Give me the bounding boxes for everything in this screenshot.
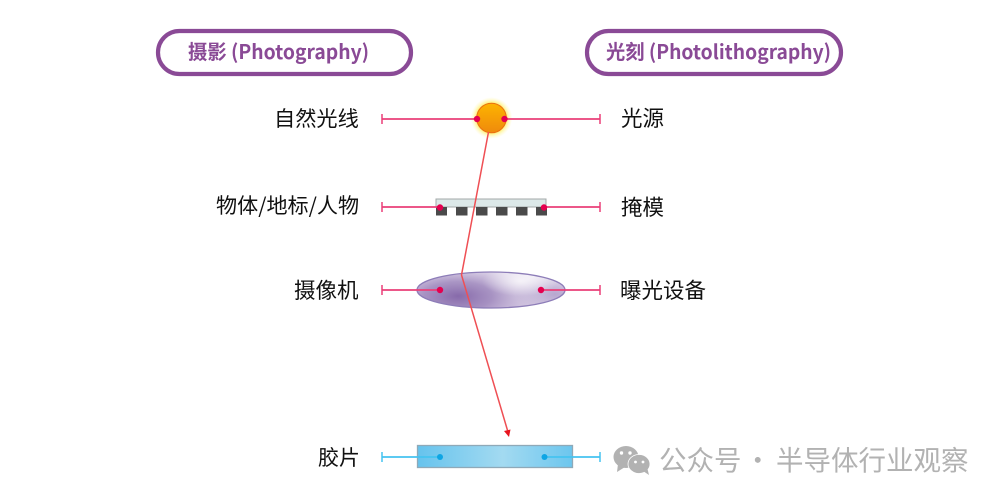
watermark text: ·	[744, 438, 772, 478]
heading: photolithography	[587, 31, 841, 74]
icon: sun light source	[471, 98, 512, 138]
watermark: WeChat account	[614, 438, 968, 478]
label: light source: 光源	[621, 102, 664, 133]
heading: photography: 摄影 (Photography)	[188, 36, 369, 65]
label: film: 胶片	[318, 442, 360, 472]
connector: mask row	[382, 202, 600, 212]
connector: lens row	[382, 285, 600, 295]
icon: WeChat logo	[614, 446, 650, 475]
label: natural light: 自然光线	[274, 102, 359, 133]
label: object / landmark / person: 物体/地标/人物	[216, 190, 359, 220]
connector: film row	[382, 452, 600, 462]
connector: light source row	[382, 114, 600, 124]
arrow: light ray	[462, 132, 510, 437]
heading: photolithography: 光刻 (Photolithography)	[606, 36, 831, 65]
icon: film plate	[418, 446, 572, 468]
icon: photomask	[436, 199, 547, 216]
watermark text: 公众号	[659, 438, 742, 478]
label: mask: 掩模	[621, 191, 664, 222]
heading: photography	[158, 31, 411, 74]
label: exposure equipment: 曝光设备	[620, 274, 706, 305]
watermark text: 半导体行业观察	[776, 438, 968, 478]
label: camera: 摄像机	[294, 274, 359, 305]
icon: lens	[417, 272, 565, 308]
